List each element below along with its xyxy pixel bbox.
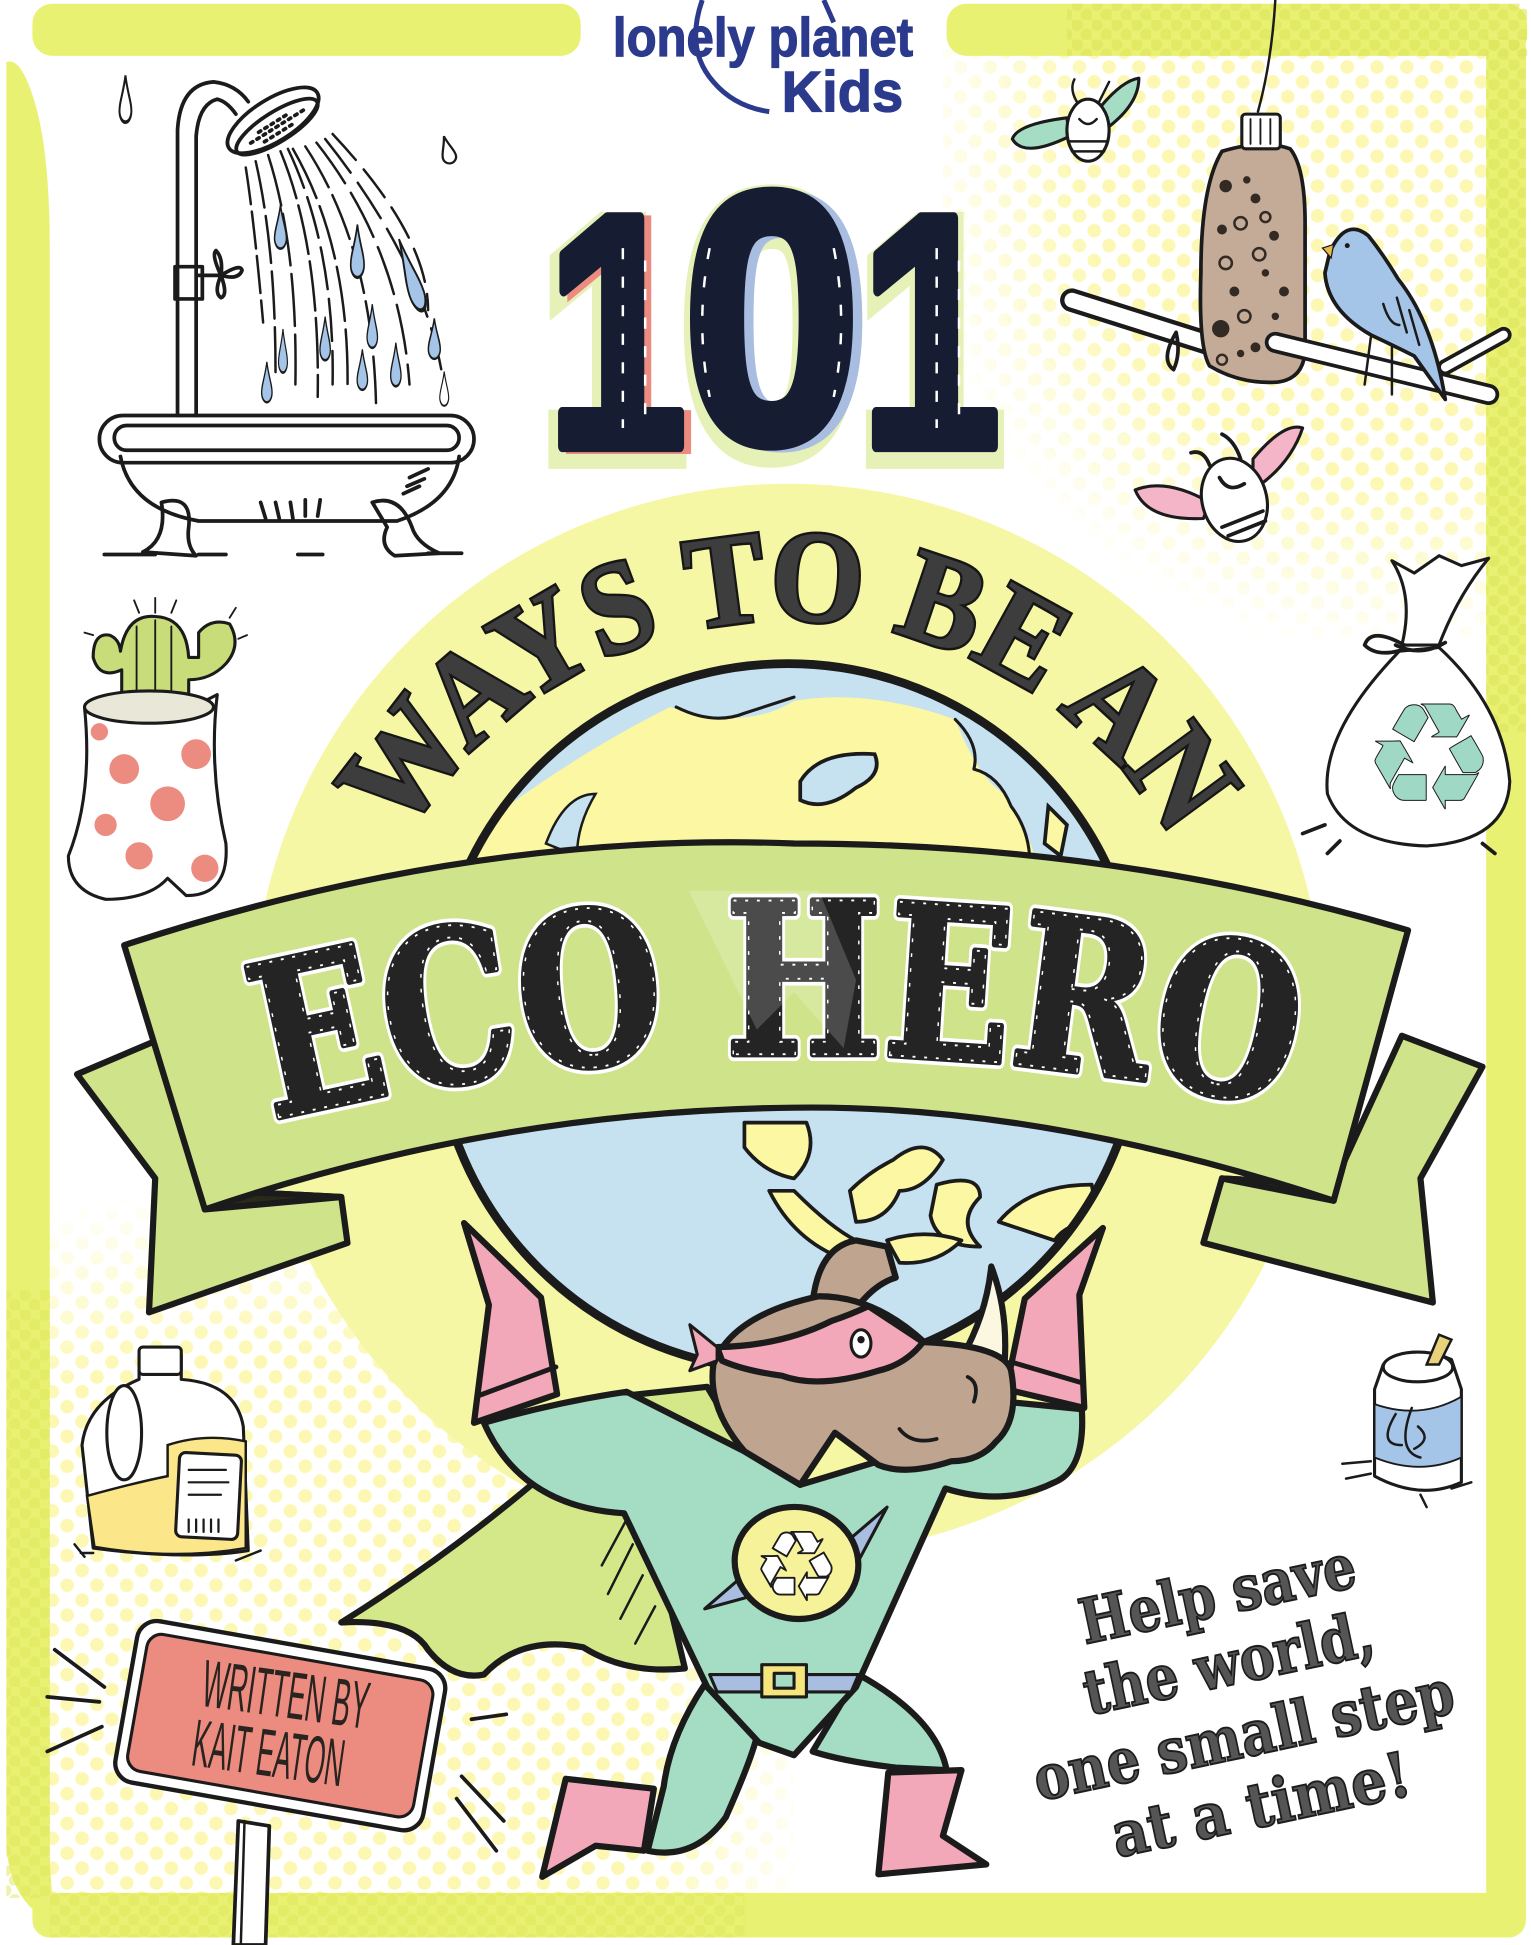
icon: smiling bee with mint wings (1012, 78, 1139, 161)
banner: eco hero (74, 839, 1486, 1316)
icon: recycling bag (1303, 556, 1510, 853)
upper cape (627, 1387, 747, 1454)
boots (542, 1779, 654, 1877)
chest emblem (705, 1497, 887, 1629)
branch in front of bottle (1445, 335, 1504, 367)
land: south islands (744, 1123, 1098, 1263)
tagline: one small step (1027, 1655, 1460, 1816)
recycling arrows on bag: ♻ (1362, 672, 1496, 845)
tagline: at a time! (1105, 1738, 1417, 1872)
icon: detergent jug (75, 1347, 261, 1560)
water streams (246, 134, 442, 403)
pink arms (464, 1223, 557, 1423)
101 digits: 0 (682, 119, 861, 518)
bluebird (1322, 229, 1445, 399)
101 pastel shadows: 0 (692, 121, 871, 521)
sign text line two: KAIT EATON (188, 1705, 349, 1801)
icon: bird feeder bottle on a branch with bluebird (1072, 0, 1504, 399)
legs (648, 1685, 757, 1853)
cape (341, 1480, 685, 1676)
101 pastel shadows: 1 (542, 151, 684, 529)
101 pastel shadows (542, 121, 1002, 529)
yellow halo circle (252, 484, 1324, 1556)
101 digits (546, 119, 1001, 518)
globe (428, 664, 1141, 1371)
branch behind bottle (1072, 300, 1241, 354)
sign post (233, 1821, 269, 1945)
rhino head (713, 1296, 1013, 1485)
101 pastel shadows: 1 (859, 151, 1002, 529)
rhino superhero (464, 1223, 1103, 1877)
101 chalk highlights (623, 248, 959, 428)
logo: lonely planet kids: Kids (782, 61, 903, 125)
banner title: ECO HERO (246, 900, 1296, 1118)
icon: cactus in a polka dot boot (68, 598, 247, 899)
logo: lonely planet kids (613, 0, 913, 125)
land: north (477, 697, 1034, 858)
tagline: Help save (1073, 1529, 1362, 1659)
banner right tail (1203, 1036, 1482, 1302)
101 pastel shadows: 0 (682, 122, 861, 529)
101 digits: 1 (860, 146, 1001, 517)
icon: shower and bathtub (99, 75, 474, 556)
chest emblem: ♻ (753, 1510, 840, 1623)
banner title: ECO HERO (240, 894, 1301, 1124)
icon: smiling bee with pink wings (1135, 427, 1303, 549)
shower head (218, 75, 329, 167)
101 digits: 1 (546, 146, 687, 517)
watermark (689, 891, 856, 1048)
water drops (262, 205, 449, 406)
hero mask (717, 1306, 923, 1381)
shower tap (175, 251, 242, 299)
sign board (112, 1618, 448, 1833)
bottle (1200, 144, 1305, 382)
stray drops (119, 76, 458, 165)
icon: crushed drink can (1342, 1335, 1471, 1507)
banner title (240, 894, 1301, 1124)
sign: author credit (47, 1618, 506, 1945)
number 101 (542, 119, 1002, 529)
heading: ways to be an: WAYS TO BE AN (330, 530, 1246, 832)
tagline (1027, 1529, 1460, 1872)
sign rays (47, 1650, 506, 1851)
rhino ear (813, 1240, 896, 1309)
mint torso and arms (484, 1392, 1082, 1755)
rhino horn (961, 1266, 1005, 1358)
banner left tail (77, 1039, 347, 1312)
bathtub (99, 416, 474, 556)
101 pastel shadows: 1 (554, 148, 694, 520)
logo: lonely planet kids: lonely planet (613, 7, 913, 68)
sign text: WRITTEN BY (198, 1646, 374, 1743)
belt (710, 1675, 859, 1692)
banner title: ECO HERO (244, 897, 1298, 1120)
shower pipe (178, 82, 248, 416)
tagline: the world, (1077, 1597, 1381, 1730)
banner ribbon (124, 842, 1408, 1209)
